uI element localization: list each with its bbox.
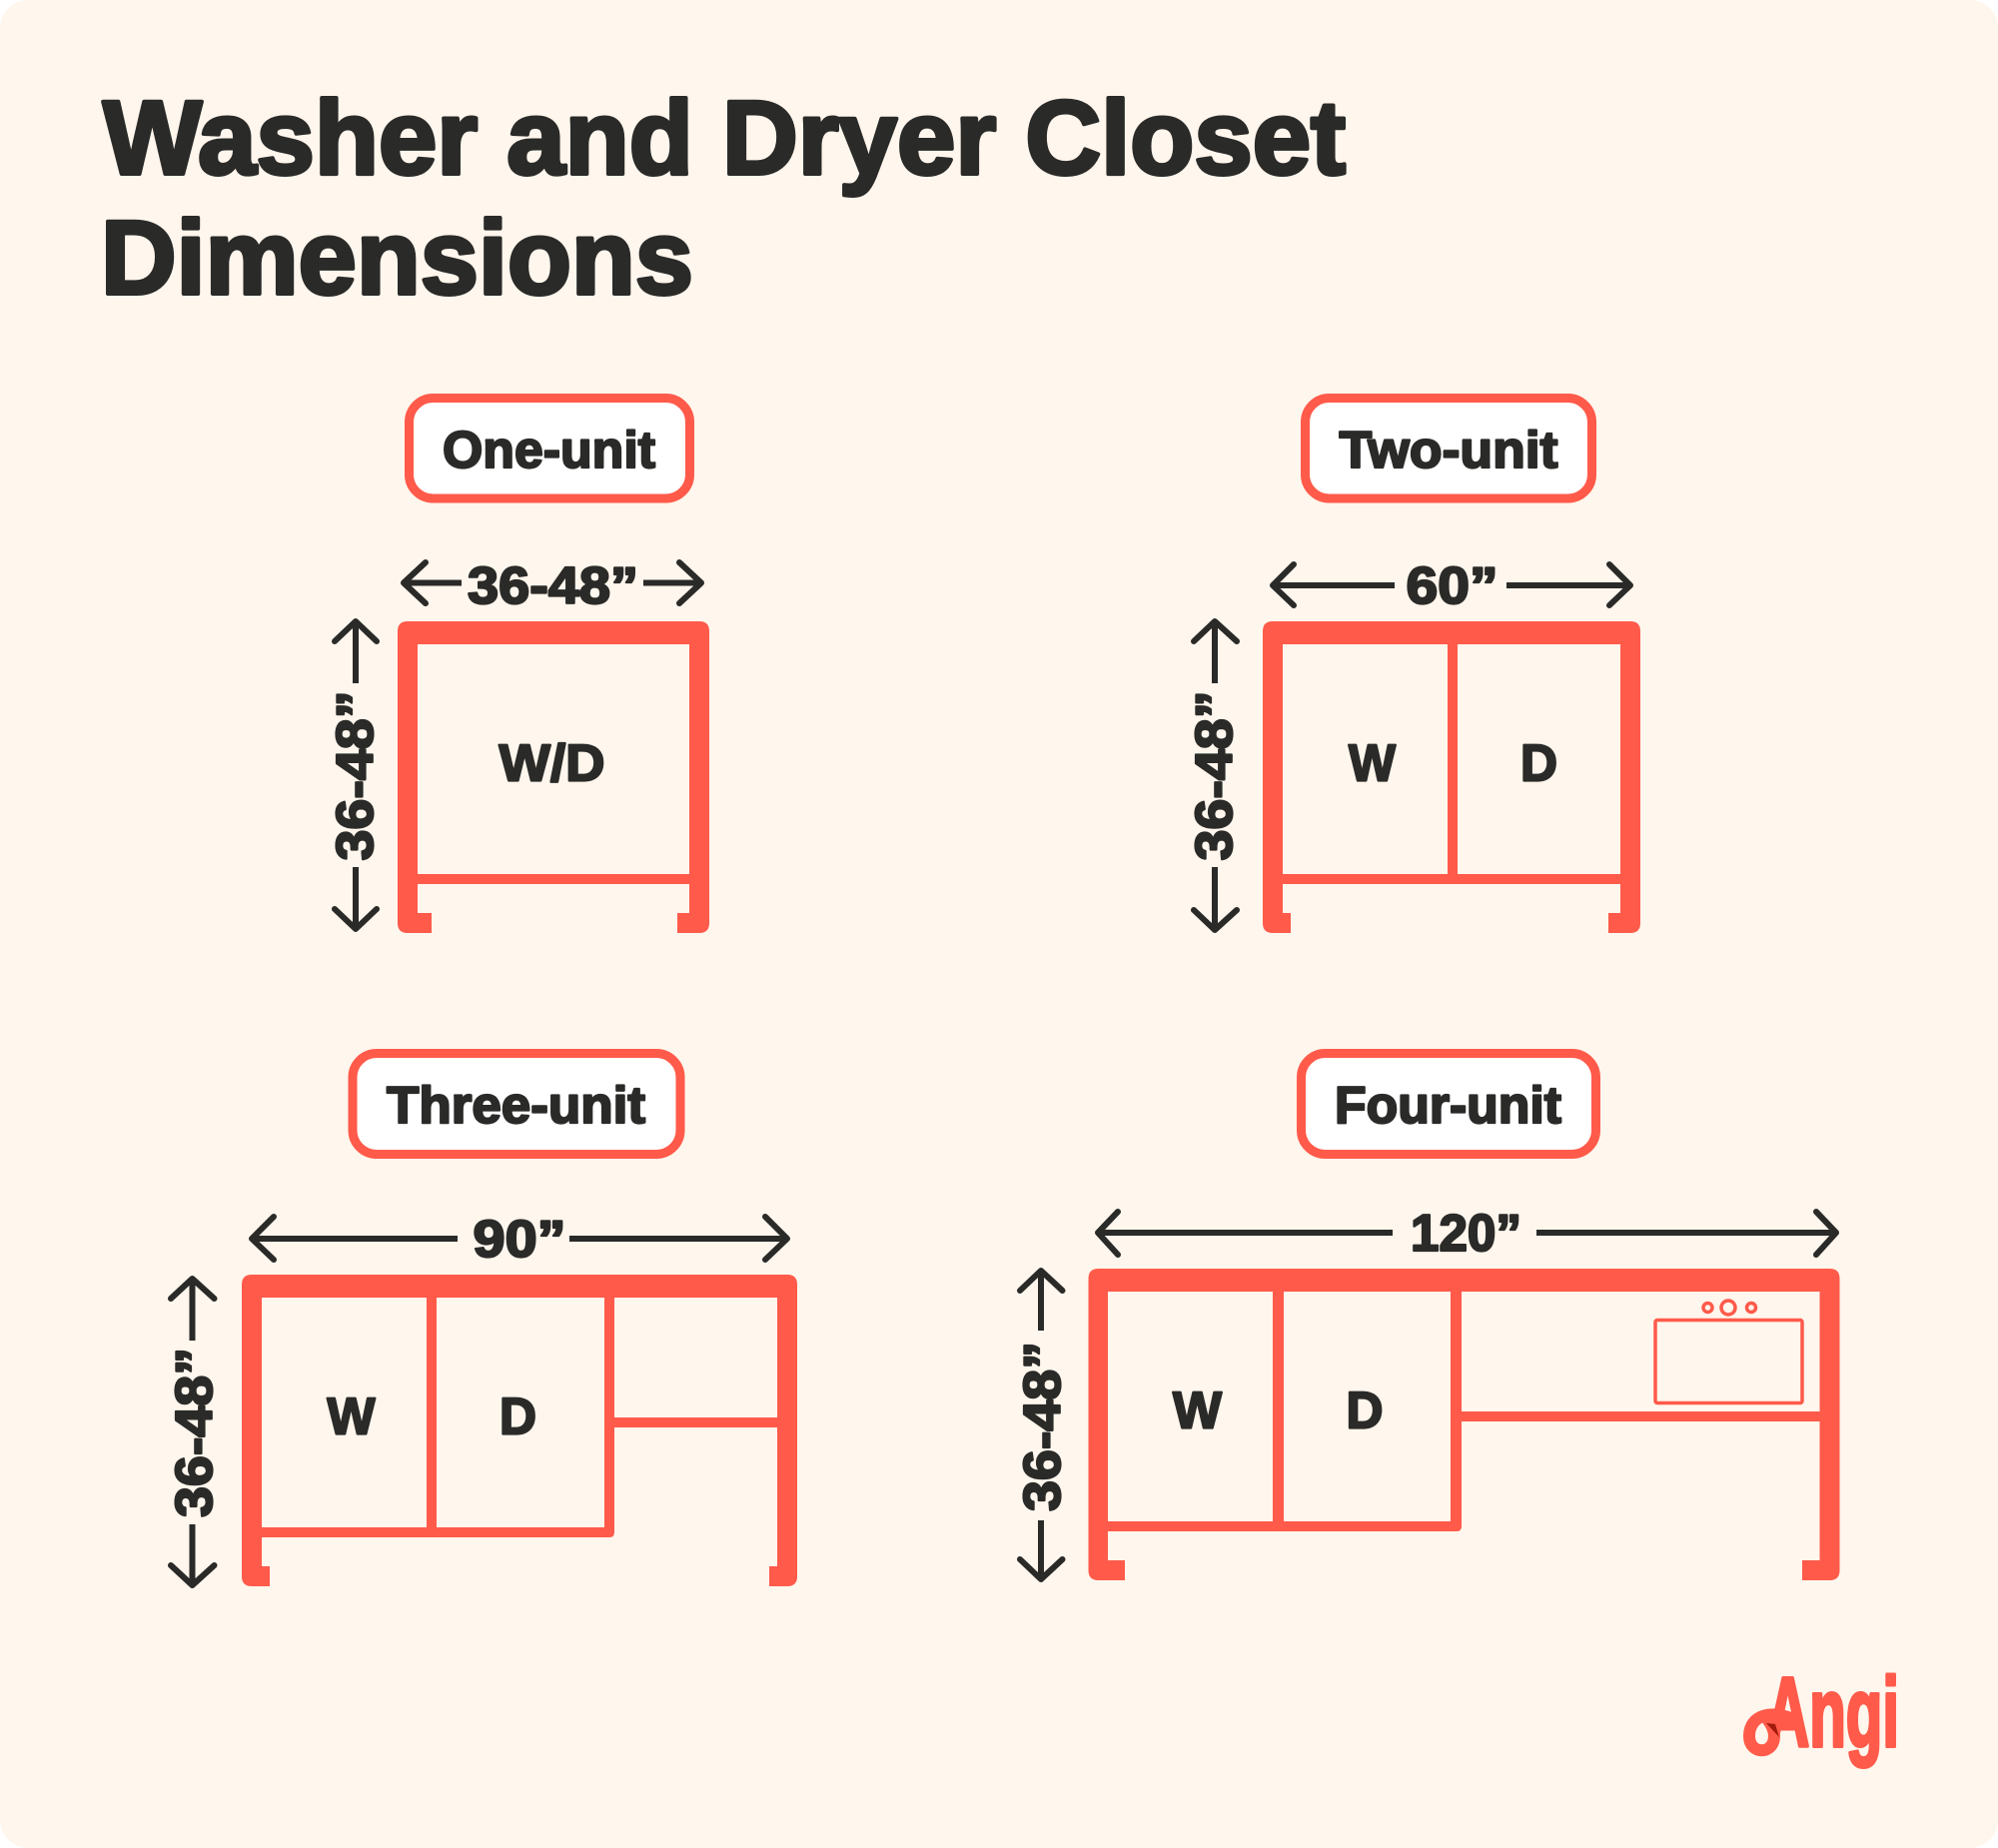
width arrow: one-unit: 36-48” — [468, 557, 638, 615]
label: one-unit: One-unit — [443, 422, 655, 479]
cabinet: four-unit: W — [1173, 1383, 1223, 1440]
cabinet: two-unit: D — [1520, 735, 1557, 793]
cabinet: one-unit — [398, 621, 709, 933]
height arrow: two-unit: 36-48” — [1186, 691, 1244, 861]
height arrow: four-unit: 36-48” — [1014, 1342, 1072, 1511]
panel: two-unit — [1186, 398, 1640, 933]
width arrow: two-unit — [1273, 557, 1630, 615]
panel: four-unit — [1014, 1053, 1840, 1580]
height arrow: three-unit: 36-48” — [166, 1348, 224, 1517]
cabinet: three-unit: W — [328, 1388, 376, 1446]
title: Dimensions — [101, 200, 693, 317]
cabinet: four-unit: D — [1347, 1383, 1383, 1440]
width arrow: four-unit — [1098, 1205, 1836, 1263]
label: four-unit: Four-unit — [1335, 1077, 1561, 1135]
width arrow: three-unit — [252, 1211, 787, 1269]
height arrow: three-unit — [166, 1279, 224, 1585]
width arrow: two-unit: 60” — [1407, 557, 1498, 615]
logo: Angi: Angi — [1766, 1657, 1899, 1767]
cabinet: two-unit: W — [1349, 735, 1397, 793]
height arrow: four-unit — [1014, 1271, 1072, 1579]
height arrow: one-unit — [327, 621, 385, 929]
cabinet: two-unit — [1263, 621, 1640, 933]
width arrow: one-unit — [404, 557, 701, 615]
label: three-unit: Three-unit — [387, 1077, 645, 1135]
width arrow: three-unit: 90” — [474, 1211, 565, 1269]
title — [101, 80, 1346, 317]
height arrow: two-unit — [1186, 621, 1244, 930]
title: Washer and Dryer Closet — [103, 80, 1346, 197]
width arrow: four-unit: 120” — [1411, 1205, 1521, 1263]
panel: three-unit — [166, 1053, 797, 1586]
cabinet: three-unit — [242, 1275, 797, 1586]
cabinet: three-unit: D — [500, 1388, 536, 1446]
height arrow: one-unit: 36-48” — [327, 691, 385, 861]
cabinet: one-unit: W/D — [500, 735, 605, 793]
logo: Angi — [1749, 1657, 1899, 1767]
label: two-unit: Two-unit — [1339, 422, 1558, 479]
cabinet: four-unit — [1089, 1269, 1840, 1580]
label: three-unit — [353, 1053, 680, 1155]
icon: stove with knobs — [1655, 1301, 1802, 1402]
label: four-unit — [1301, 1053, 1596, 1155]
label: two-unit — [1305, 398, 1592, 498]
label: one-unit — [410, 398, 689, 498]
panel: one-unit — [327, 398, 709, 933]
